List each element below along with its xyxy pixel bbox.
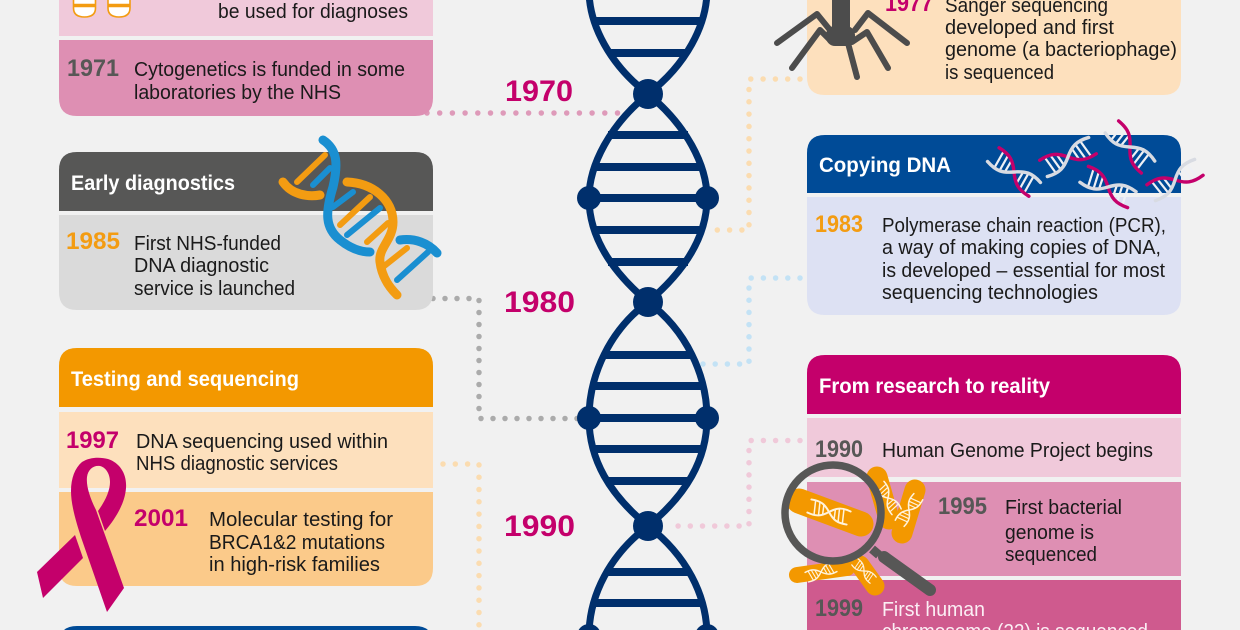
connector: sequencing orange dotted line [713, 79, 800, 230]
panel header [59, 348, 433, 407]
panel row: 1995: genome is [1005, 522, 1094, 544]
panel header: From research to reality [819, 374, 1050, 398]
decade label 1970: 1970 [505, 75, 573, 108]
panel: sanger sequencing: developed and first [945, 17, 1114, 39]
panel body [807, 197, 1181, 315]
panel row: diagnoses: be used for diagnoses [218, 1, 408, 23]
panel row: 1971: 1971 [67, 55, 119, 82]
panel: top-left chromosomes and cytogenetics [59, 0, 433, 116]
connector: 1970 pink dotted line [427, 110, 620, 116]
panel header [807, 135, 1181, 193]
panel row: 1995: 1995 [938, 493, 987, 520]
panel row: 1999: 1999 [815, 595, 863, 622]
icon: bacteriophage [777, 0, 907, 77]
panel body: 1985 [66, 228, 120, 255]
panel row: 1997 [59, 412, 433, 488]
panel row: 1990: 1990 [815, 436, 863, 463]
panel header [807, 355, 1181, 414]
panel body: service is launched [134, 278, 295, 300]
icon: awareness ribbon [37, 458, 126, 612]
panel row: 1997: DNA sequencing used within [136, 431, 388, 453]
panel: sanger sequencing [807, 0, 1181, 95]
panel row: 2001: 2001 [134, 505, 188, 532]
panel body: sequencing technologies [882, 282, 1098, 304]
panel body: 1983 [815, 211, 863, 238]
icon: test tubes [74, 0, 130, 17]
panel body: a way of making copies of DNA, [882, 237, 1161, 259]
connector: 1980 grey dotted line [433, 298, 590, 418]
panel: testing and sequencing [37, 348, 433, 612]
panel body: DNA diagnostic [134, 255, 269, 277]
panel: bottom-left blue header [59, 626, 433, 630]
panel row: diagnoses [59, 0, 433, 36]
panel header: Early diagnostics [71, 171, 235, 195]
panel body [59, 215, 433, 310]
panel row: 1990 [807, 418, 1181, 477]
panel header: Copying DNA [819, 153, 951, 177]
panel row: 2001: in high-risk families [209, 554, 380, 576]
panel body: is developed – essential for most [882, 260, 1165, 282]
panel body: First NHS-funded [134, 233, 281, 255]
panel: sanger sequencing: genome (a bacteriophage) [945, 39, 1177, 61]
central DNA double helix [577, 0, 719, 630]
icons: small DNA copies [987, 121, 1203, 208]
panel: from research to reality [807, 355, 1181, 630]
panel row: 1997: 1997 [66, 427, 119, 454]
panel header [59, 152, 433, 211]
panel row: 2001: Molecular testing for [209, 509, 393, 531]
panel row: 1971: Cytogenetics is funded in some [134, 59, 405, 81]
panel: sanger sequencing: is sequenced [945, 62, 1054, 84]
panel row: 1999 [807, 580, 1181, 630]
icon: orange and blue DNA [283, 140, 437, 295]
decade label 1990: 1990 [504, 510, 575, 543]
panel row: 1999: First human [882, 599, 985, 621]
panel row: 2001 [59, 492, 433, 586]
panel row: 1995: First bacterial [1005, 497, 1122, 519]
connector: testing orange dotted line [443, 464, 479, 630]
panel: copying DNA [807, 121, 1203, 315]
panel body: Polymerase chain reaction (PCR), [882, 215, 1166, 237]
panel row: 1995: sequenced [1005, 544, 1097, 566]
panel row: 2001: BRCA1&2 mutations [209, 532, 385, 554]
panel row: 1971: laboratories by the NHS [134, 82, 341, 104]
connector: copying blue dotted line [700, 278, 800, 364]
decade label 1980: 1980 [504, 286, 575, 319]
connector: research pink dotted line [670, 440, 800, 526]
panel row: 1990: Human Genome Project begins [882, 440, 1153, 462]
panel: early diagnostics [59, 140, 437, 310]
icon: magnifying glass over chromosomes [785, 465, 930, 590]
panel row: 1971 [59, 40, 433, 116]
panel row: 1995 [807, 482, 1181, 576]
panel row: 1997: NHS diagnostic services [136, 453, 338, 475]
panel header: Testing and sequencing [71, 367, 299, 391]
